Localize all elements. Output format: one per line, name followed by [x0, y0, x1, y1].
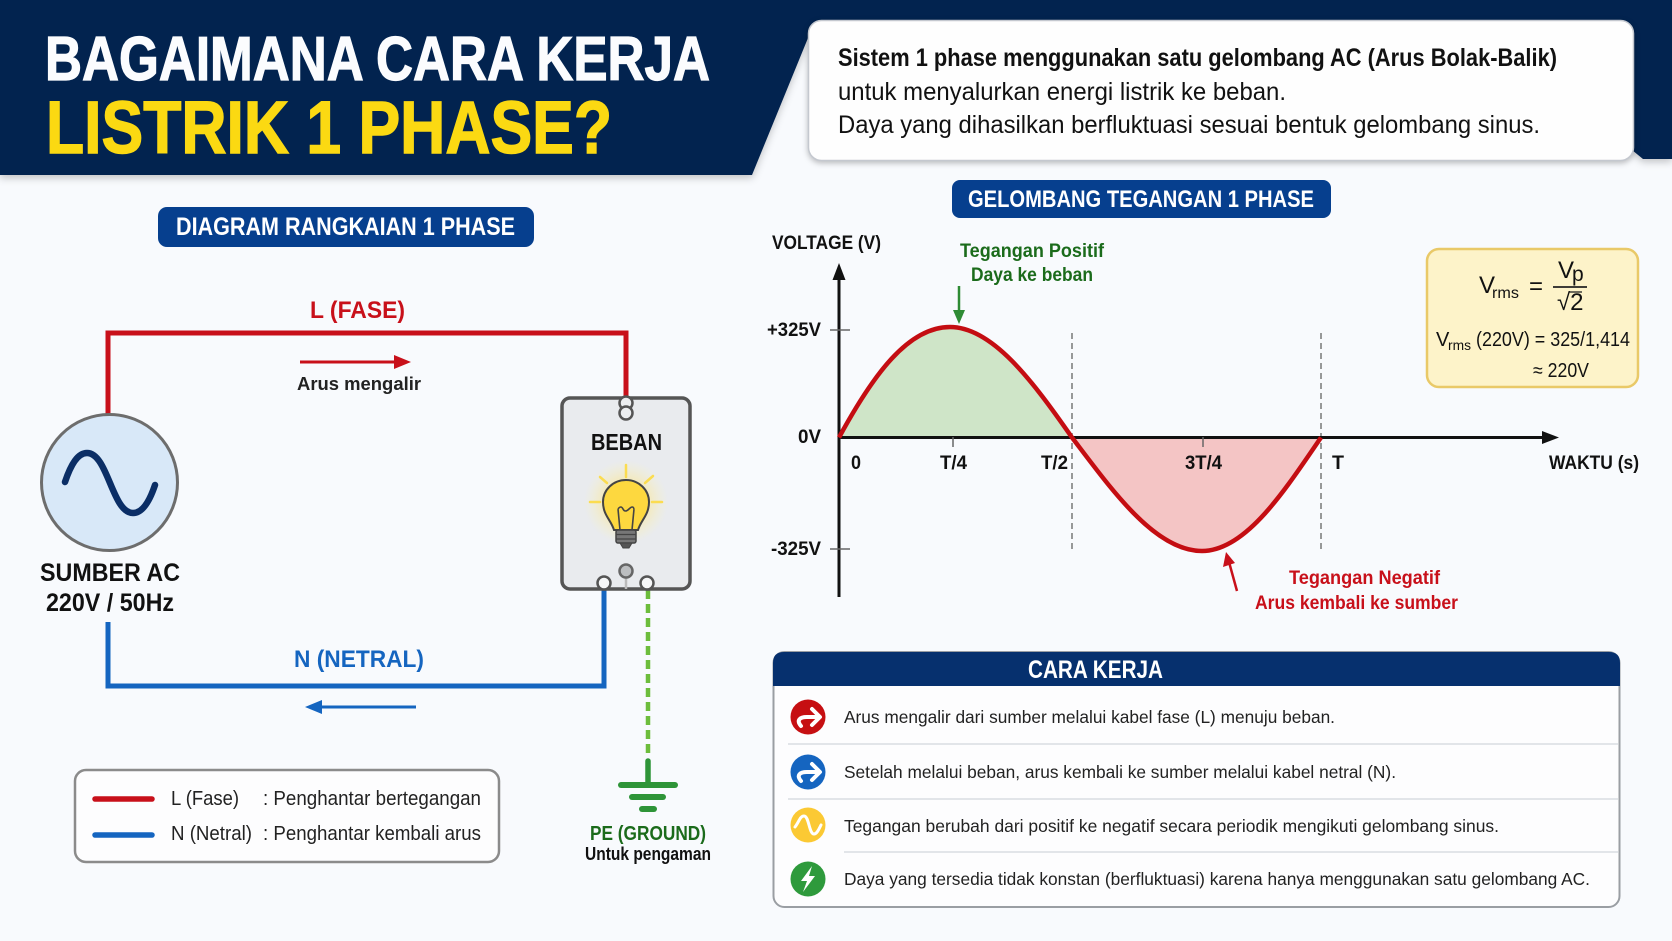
intro card: Daya yang dihasilkan berfluktuasi sesuai bentuk gelombang sinus. [838, 111, 1540, 139]
panel header [773, 652, 1620, 686]
formula box: rms [1448, 337, 1471, 353]
annotation: negative voltage [1223, 552, 1459, 614]
formula box: V [1479, 272, 1495, 299]
intro card [808, 20, 1634, 160]
axis labels: T/2 [1041, 453, 1068, 474]
load box: BEBAN [591, 429, 662, 455]
panel: cara kerja [773, 652, 1620, 907]
step 2 [790, 754, 1396, 790]
legend: : Penghantar kembali arus [263, 823, 481, 845]
icon: light bulb [584, 460, 668, 548]
label: PE ground: PE (GROUND) [590, 823, 706, 845]
circuit diagram [40, 297, 711, 864]
AC source: 220V / 50Hz [46, 589, 174, 617]
legend: L (Fase) [171, 788, 239, 810]
legend: N (Netral) [171, 823, 252, 845]
formula box: p [1572, 263, 1584, 286]
heading: diagram rangkaian: DIAGRAM RANGKAIAN 1 PHASE [176, 213, 515, 241]
axis labels [767, 233, 1639, 560]
axis labels: 0 [851, 453, 861, 474]
arrow: current forward [300, 355, 411, 369]
axis labels: +325V [767, 320, 821, 341]
axis labels: VOLTAGE (V) [772, 233, 881, 254]
load box [562, 396, 690, 590]
heading: diagram rangkaian [158, 207, 534, 247]
formula box [1427, 249, 1638, 387]
intro card: Sistem 1 phase menggunakan satu gelombang AC (Arus Bolak-Balik) [838, 44, 1557, 72]
step 3: Tegangan berubah dari positif ke negatif secara periodik mengikuti gelombang sinus. [844, 816, 1499, 836]
negative half area [1072, 438, 1321, 551]
title: LISTRIK 1 PHASE? [46, 86, 612, 169]
annotation: negative voltage: Tegangan Negatif [1289, 568, 1441, 589]
wire: L phase [108, 333, 626, 414]
formula box: √2 [1557, 289, 1584, 316]
formula box: ≈ 220V [1533, 360, 1590, 382]
x axis [839, 431, 1559, 444]
header banner [0, 0, 1672, 175]
title [45, 25, 710, 169]
AC source: SUMBER AC [40, 559, 180, 587]
label: PE ground [585, 823, 711, 864]
formula box: V [1558, 257, 1574, 284]
arrow: current return [305, 700, 416, 714]
icon: ground [621, 761, 675, 809]
legend [75, 770, 499, 862]
wire: N neutral [108, 590, 604, 686]
axis labels: 0V [798, 427, 821, 448]
intro card: untuk menyalurkan energi listrik ke beban. [838, 78, 1286, 106]
step 4 [790, 862, 1590, 896]
annotation: positive voltage [953, 241, 1105, 324]
formula box: = [1529, 273, 1543, 300]
heading: gelombang tegangan [952, 180, 1331, 218]
legend: : Penghantar bertegangan [263, 788, 481, 810]
axis labels: WAKTU (s) [1549, 453, 1639, 474]
label: N netral: N (NETRAL) [294, 646, 424, 673]
formula box: rms [1492, 285, 1519, 302]
annotation: negative voltage: Arus kembali ke sumber [1255, 593, 1459, 614]
axis labels: -325V [771, 539, 821, 560]
sine curve [839, 327, 1321, 551]
step 1: Arus mengalir dari sumber melalui kabel fase (L) menuju beban. [844, 707, 1335, 727]
step 3 [790, 808, 1499, 842]
title: BAGAIMANA CARA KERJA [45, 25, 710, 94]
label: arus mengalir: Arus mengalir [297, 373, 421, 394]
AC source [40, 414, 180, 617]
axis labels: T/4 [940, 453, 967, 474]
annotation: positive voltage: Tegangan Positif [960, 241, 1105, 262]
formula box: V [1436, 329, 1450, 351]
panel header: CARA KERJA [1028, 656, 1163, 684]
step 2: Setelah melalui beban, arus kembali ke sumber melalui kabel netral (N). [844, 762, 1396, 782]
positive half area [839, 327, 1072, 438]
axis labels: 3T/4 [1185, 453, 1222, 474]
heading: gelombang tegangan: GELOMBANG TEGANGAN 1 PHASE [968, 186, 1314, 213]
step 4: Daya yang tersedia tidak konstan (berfluktuasi) karena hanya menggunakan satu gelombang AC. [844, 869, 1590, 889]
voltage wave chart [767, 233, 1639, 614]
label: L fase: L (FASE) [310, 297, 405, 324]
step 1 [790, 700, 1335, 734]
label: PE ground: Untuk pengaman [585, 844, 711, 864]
formula box: (220V) = 325/1,414 [1476, 329, 1630, 351]
wire: PE ground [646, 590, 650, 755]
y axis [832, 263, 846, 597]
axis labels: T [1332, 453, 1344, 474]
annotation: positive voltage: Daya ke beban [971, 265, 1093, 286]
